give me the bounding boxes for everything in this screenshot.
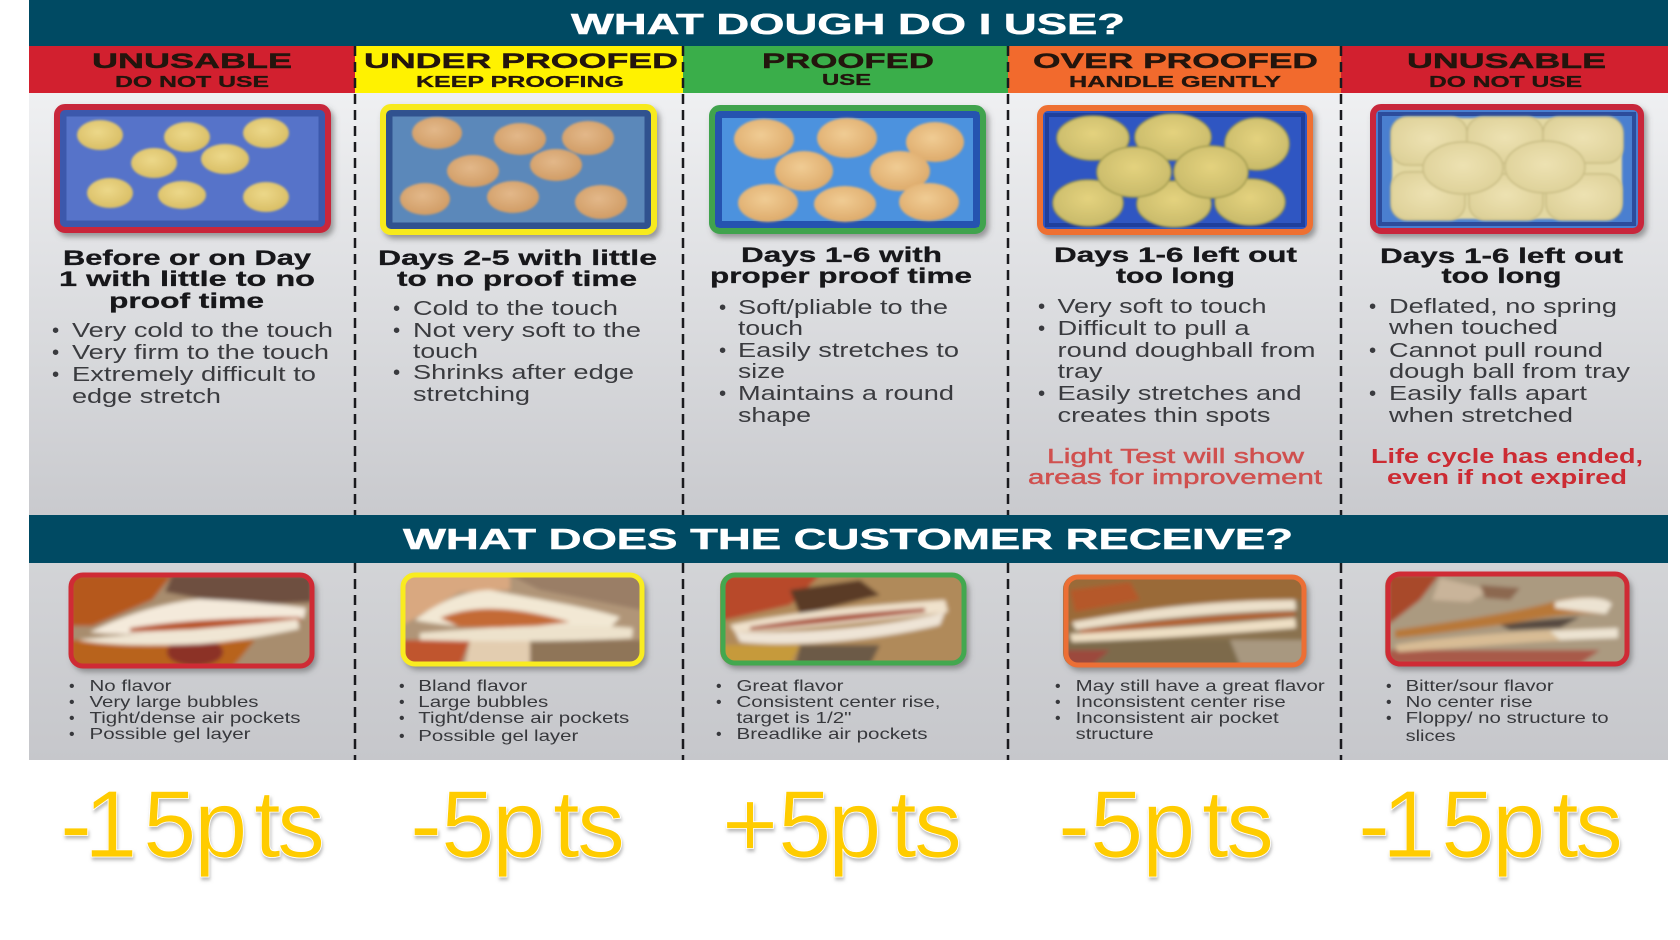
text block: customer outcome: Floppy/ no structure to [1406, 710, 1609, 727]
column: unusable, before day 1 [29, 46, 355, 408]
heading: days 1-6 left out too long: too long [1442, 264, 1562, 288]
text block: customer outcome: • [69, 726, 75, 743]
text block: customer outcome: • [716, 678, 722, 695]
heading: days 2-5 [378, 246, 657, 291]
text block: customer outcome: • [1386, 710, 1392, 727]
panel: lower grey background [29, 563, 1668, 760]
photo: pizza slice cross-section orange frame [1063, 575, 1306, 667]
text block: dough characteristics: Easily stretches and [1058, 382, 1302, 405]
text block: customer outcome: • [69, 710, 75, 727]
text block: customer outcome: Possible gel layer [418, 728, 579, 745]
text block: dough characteristics: Very firm to the touch [72, 341, 329, 364]
text block: dough characteristics: • [52, 363, 59, 386]
callout: life cycle ended: even if not expired [1387, 466, 1627, 489]
text block: customer outcome: • [399, 728, 405, 745]
heading: days 1-6 with proper proof: proper proof time [710, 264, 972, 288]
text block: customer outcome: Great flavor [736, 678, 844, 695]
callout: light test [1028, 445, 1322, 489]
heading: days 1-6 left out too long: too long [1116, 264, 1235, 288]
text block: dough characteristics: Cannot pull round [1389, 339, 1603, 362]
heading: days 1-6 with proper proof [710, 243, 972, 288]
status band: unusable: UNUSABLE [92, 50, 292, 73]
text block: customer outcome: • [716, 694, 722, 711]
text block: customer outcome: • [1386, 694, 1392, 711]
status band: unusable: UNUSABLE [1407, 50, 1606, 73]
status band: unusable: DO NOT USE [115, 74, 269, 91]
heading: days 1-6 left out too long: Days 1-6 left out [1380, 244, 1623, 268]
text block: dough characteristics: Difficult to pull a [1058, 317, 1250, 340]
heading: before or on day 1: proof time [109, 289, 264, 313]
heading: days 2-5: to no proof time [397, 267, 637, 291]
photo: dough tray under proofed [383, 107, 654, 232]
text block: customer outcome: No flavor [90, 678, 172, 695]
text block: dough characteristics: touch [413, 340, 478, 363]
callout: light test: areas for improvement [1028, 466, 1322, 489]
text block: dough characteristics: • [52, 319, 59, 342]
text block: dough characteristics: Soft/pliable to the [738, 296, 948, 319]
text block: dough characteristics: stretching [413, 383, 530, 406]
text block: dough characteristics: round doughball from [1058, 339, 1316, 362]
text block: dough characteristics: Not very soft to the [413, 319, 641, 342]
text block: customer outcome: • [69, 678, 75, 695]
text block: dough characteristics: Easily stretches to [738, 339, 959, 362]
text block: dough characteristics: Extremely difficult to [72, 363, 316, 386]
score: minus 5 points: -5pts [1058, 771, 1274, 878]
status band: over proofed: OVER PROOFED [1033, 50, 1318, 73]
status band: unusable [1341, 46, 1668, 93]
photo: pizza slice cross-section red frame [69, 573, 314, 668]
score: minus 15 points: -15pts [60, 771, 325, 878]
text block: dough characteristics: size [738, 360, 785, 383]
text block: dough characteristics: • [719, 339, 726, 362]
text block: dough characteristics: edge stretch [72, 385, 221, 408]
text block: customer outcome [1055, 678, 1326, 743]
heading: before or on day 1 [59, 246, 315, 313]
text block: dough characteristics: Cold to the touch [413, 297, 618, 320]
text block: dough characteristics: • [1038, 317, 1045, 340]
section header: what does the customer receive: WHAT DOES THE CUSTOMER RECEIVE? [403, 524, 1293, 556]
panel: upper grey background [29, 93, 1668, 515]
status band: unusable: DO NOT USE [1429, 74, 1582, 91]
text block: customer outcome: slices [1406, 728, 1456, 745]
text block: dough characteristics: • [52, 341, 59, 364]
column: proofed [683, 46, 1008, 427]
text block: dough characteristics [52, 319, 333, 408]
title: what dough do I use: WHAT DOUGH DO I USE? [571, 9, 1125, 41]
status band: proofed: PROOFED [762, 50, 934, 73]
text block: customer outcome: Inconsistent center rise [1076, 694, 1286, 711]
text block: dough characteristics: • [393, 361, 400, 384]
customer result: under proofed [399, 573, 644, 745]
text block: dough characteristics: dough ball from tray [1389, 360, 1631, 383]
text block: dough characteristics [1369, 295, 1631, 427]
text block: dough characteristics: • [1369, 295, 1376, 318]
text block: dough characteristics: • [393, 319, 400, 342]
customer result: over proofed [1055, 575, 1326, 743]
text block: customer outcome: Tight/dense air pockets [90, 710, 300, 727]
status band: under proofed: KEEP PROOFING [416, 74, 624, 91]
text block: dough characteristics: when stretched [1388, 404, 1573, 427]
score: minus 5 points: -5pts [410, 771, 625, 878]
text block: dough characteristics: when touched [1388, 316, 1558, 339]
text block: customer outcome: No center rise [1406, 694, 1533, 711]
status band: under proofed: UNDER PROOFED [364, 50, 678, 73]
text block: dough characteristics [1038, 295, 1316, 427]
text block: dough characteristics: touch [738, 317, 803, 340]
photo: pizza slice cross-section green frame [720, 573, 966, 665]
text block: dough characteristics: • [1038, 382, 1045, 405]
text block: dough characteristics: • [719, 382, 726, 405]
text block: customer outcome: • [399, 694, 405, 711]
text block: customer outcome [69, 678, 300, 743]
status band: over proofed: HANDLE GENTLY [1069, 74, 1282, 91]
text block: customer outcome: target is 1/2" [736, 710, 852, 727]
heading: days 1-6 left out too long [1380, 244, 1623, 288]
status band: unusable [29, 46, 355, 93]
heading: before or on day 1: 1 with little to no [59, 267, 315, 291]
text block: customer outcome: Breadlike air pockets [736, 726, 928, 743]
status band: proofed: USE [822, 72, 871, 89]
text block: customer outcome: • [1055, 694, 1061, 711]
column: unusable, left out too long [1341, 46, 1668, 489]
text block: dough characteristics: • [1369, 339, 1376, 362]
text block: customer outcome [1386, 678, 1609, 745]
photo: dough tray proofed [712, 108, 983, 231]
text block: dough characteristics: creates thin spots [1058, 404, 1270, 427]
heading: days 1-6 left out too long: Days 1-6 left out [1054, 243, 1297, 267]
text block: dough characteristics: Very soft to touch [1058, 295, 1266, 318]
text block: dough characteristics: Easily falls apart [1389, 382, 1587, 405]
text block: customer outcome: Bitter/sour flavor [1406, 678, 1554, 695]
column: under proofed [355, 46, 683, 406]
callout: life cycle ended: Life cycle has ended, [1371, 445, 1643, 468]
text block: customer outcome: • [716, 726, 722, 743]
text block: dough characteristics: Shrinks after edge [413, 361, 634, 384]
text block: customer outcome: Tight/dense air pockets [418, 710, 629, 727]
title: what dough do I use [29, 0, 1668, 46]
photo: dough tray deflated [1373, 107, 1641, 231]
text block: customer outcome: Large bubbles [418, 694, 548, 711]
customer result: unusable late [1385, 572, 1629, 745]
text block: customer outcome: Bland flavor [418, 678, 528, 695]
text block: customer outcome: Possible gel layer [90, 726, 251, 743]
text block: customer outcome: • [1055, 678, 1061, 695]
photo: pizza slice cross-section yellow frame [401, 573, 644, 666]
heading: days 1-6 with proper proof: Days 1-6 with [741, 243, 942, 267]
score: minus 15 points: -15pts [1358, 771, 1623, 878]
text block: customer outcome: • [1386, 678, 1392, 695]
text block: customer outcome [399, 678, 629, 745]
callout: life cycle ended [1371, 445, 1643, 489]
text block: customer outcome: Consistent center rise, [736, 694, 940, 711]
status band: under proofed [355, 46, 683, 93]
text block: dough characteristics [393, 297, 641, 406]
text block: dough characteristics: • [393, 297, 400, 320]
text block: customer outcome: Inconsistent air pocket [1076, 710, 1279, 727]
text block: customer outcome: • [399, 710, 405, 727]
section header: what does the customer receive [29, 515, 1668, 563]
heading: days 1-6 left out too long [1054, 243, 1297, 288]
text block: dough characteristics: Very cold to the touch [72, 319, 333, 342]
photo: dough tray unusable [57, 107, 328, 230]
text block: dough characteristics: • [1038, 295, 1045, 318]
text block: dough characteristics [719, 296, 959, 427]
text block: dough characteristics: tray [1058, 360, 1103, 383]
text block: customer outcome: May still have a great flavor [1076, 678, 1326, 695]
customer result: proofed [716, 573, 966, 743]
text block: dough characteristics: • [719, 296, 726, 319]
photo: pizza slice cross-section red frame [1385, 572, 1629, 666]
status band: over proofed [1008, 46, 1341, 93]
text block: dough characteristics: shape [738, 404, 811, 427]
customer result: unusable early [69, 573, 314, 743]
text block: customer outcome: • [1055, 710, 1061, 727]
text block: customer outcome: Very large bubbles [90, 694, 258, 711]
score: plus 5 points: +5pts [722, 771, 962, 878]
heading: days 2-5: Days 2-5 with little [378, 246, 657, 270]
text block: customer outcome [716, 678, 940, 743]
text block: customer outcome: • [69, 694, 75, 711]
column: over proofed [1008, 46, 1341, 489]
text block: dough characteristics: Deflated, no spring [1389, 295, 1617, 318]
text block: customer outcome: • [399, 678, 405, 695]
photo: dough tray over proofed [1040, 108, 1310, 232]
text block: customer outcome: structure [1076, 726, 1154, 743]
text block: dough characteristics: Maintains a round [738, 382, 954, 405]
text block: dough characteristics: • [1369, 382, 1376, 405]
callout: light test: Light Test will show [1047, 445, 1304, 468]
heading: before or on day 1: Before or on Day [63, 246, 311, 270]
status band: proofed [683, 46, 1008, 93]
